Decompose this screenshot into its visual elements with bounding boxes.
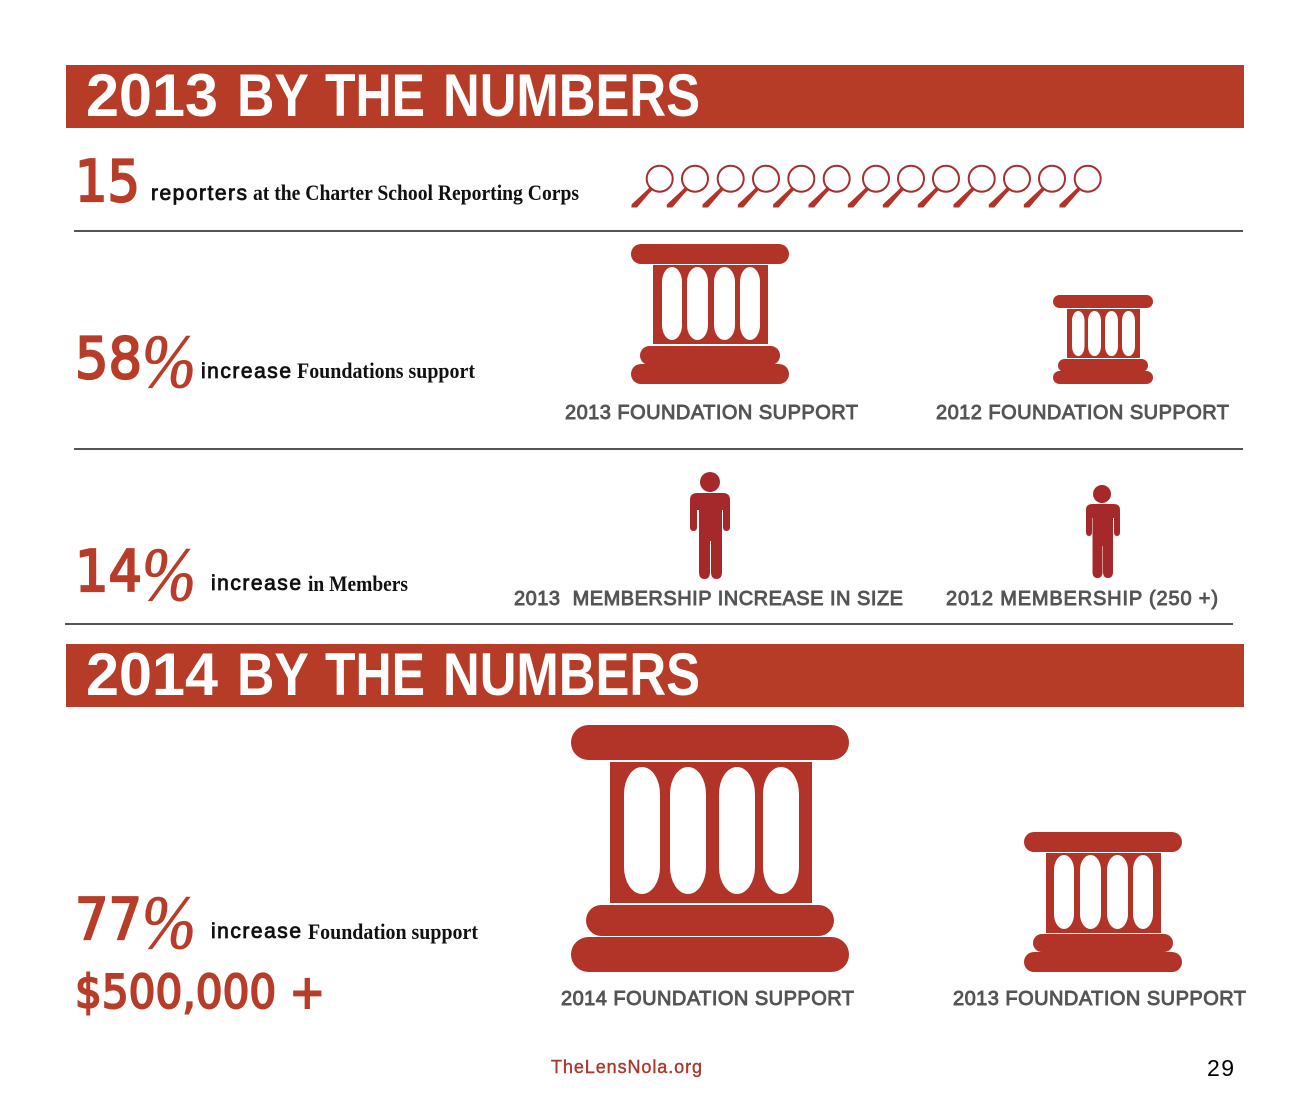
banner: 2014 by the numbers: [66, 641, 1244, 708]
banner: 2013 by the numbers: NUMBERS: [443, 62, 700, 129]
label: 2013 foundation support, 2014 comparison: 2013 FOUNDATION SUPPORT: [953, 988, 1246, 1010]
stat: 14% increase in members: [75, 533, 408, 617]
stat: 58% increase foundations support: 58: [75, 326, 142, 392]
banner: 2014 by the numbers: BY: [237, 641, 309, 708]
icon: 2014 foundation column: [571, 725, 849, 972]
stat: 77% increase foundation support: 77: [75, 887, 142, 953]
page number: 29: [1207, 1055, 1234, 1081]
label: 2013 membership increase in size: 2013 MEMBERSHIP INCREASE IN SIZE: [514, 588, 903, 610]
label: 2012 foundation support: 2012 FOUNDATION SUPPORT: [936, 402, 1229, 424]
icon: 2013 foundation column, 2014 comparison: [1024, 832, 1182, 972]
stat: 15 reporters: 15: [75, 149, 140, 215]
stat: 14% increase in members: %: [142, 533, 196, 617]
stat: 58% increase foundations support: %: [142, 320, 196, 404]
label: 2014 foundation support: 2014 FOUNDATION SUPPORT: [561, 988, 854, 1010]
stat: 15 reporters: at the Charter School Reporting Corps: [253, 180, 579, 205]
banner: 2013 by the numbers: 2013: [86, 62, 218, 129]
stat: 15 reporters: reporters: [151, 182, 247, 205]
icon: 2012 foundation column: [1053, 295, 1153, 384]
stat: 77% increase foundation support: Foundation support: [308, 919, 479, 944]
banner: 2014 by the numbers: 2014: [86, 641, 219, 708]
stat: 14% increase in members: 14: [75, 539, 142, 605]
icon: 2013 foundation column: [631, 244, 789, 384]
banner: 2013 by the numbers: THE: [325, 62, 425, 129]
stat: 14% increase in members: increase: [211, 572, 301, 595]
icons: 13 magnifying glasses: [632, 166, 1101, 208]
stat: 15 reporters: [75, 149, 579, 215]
banner: 2013 by the numbers: [66, 62, 1244, 129]
footer: website: TheLensNola.org: [551, 1057, 702, 1077]
banner: 2013 by the numbers: BY: [237, 62, 309, 129]
stat: 58% increase foundations support: Foundations support: [297, 358, 476, 383]
stat: 58% increase foundations support: [75, 320, 476, 404]
label: 2012 membership: 2012 MEMBERSHIP (250 +): [946, 588, 1218, 610]
stat: 77% increase foundation support: [75, 881, 479, 965]
stat: 77% increase foundation support: %: [142, 881, 196, 965]
label: 2013 foundation support: 2013 FOUNDATION SUPPORT: [565, 402, 858, 424]
icon: 2013 member figure: [690, 472, 730, 579]
stat: 77% increase foundation support: increase: [211, 920, 301, 943]
icon: 2012 member figure: [1086, 485, 1120, 578]
banner: 2014 by the numbers: THE: [325, 641, 425, 708]
banner: 2014 by the numbers: NUMBERS: [443, 641, 700, 708]
stat: $500,000 +: $500,000 +: [75, 965, 325, 1019]
stat: 14% increase in members: in Members: [308, 571, 408, 596]
stat: 58% increase foundations support: increase: [201, 360, 291, 383]
